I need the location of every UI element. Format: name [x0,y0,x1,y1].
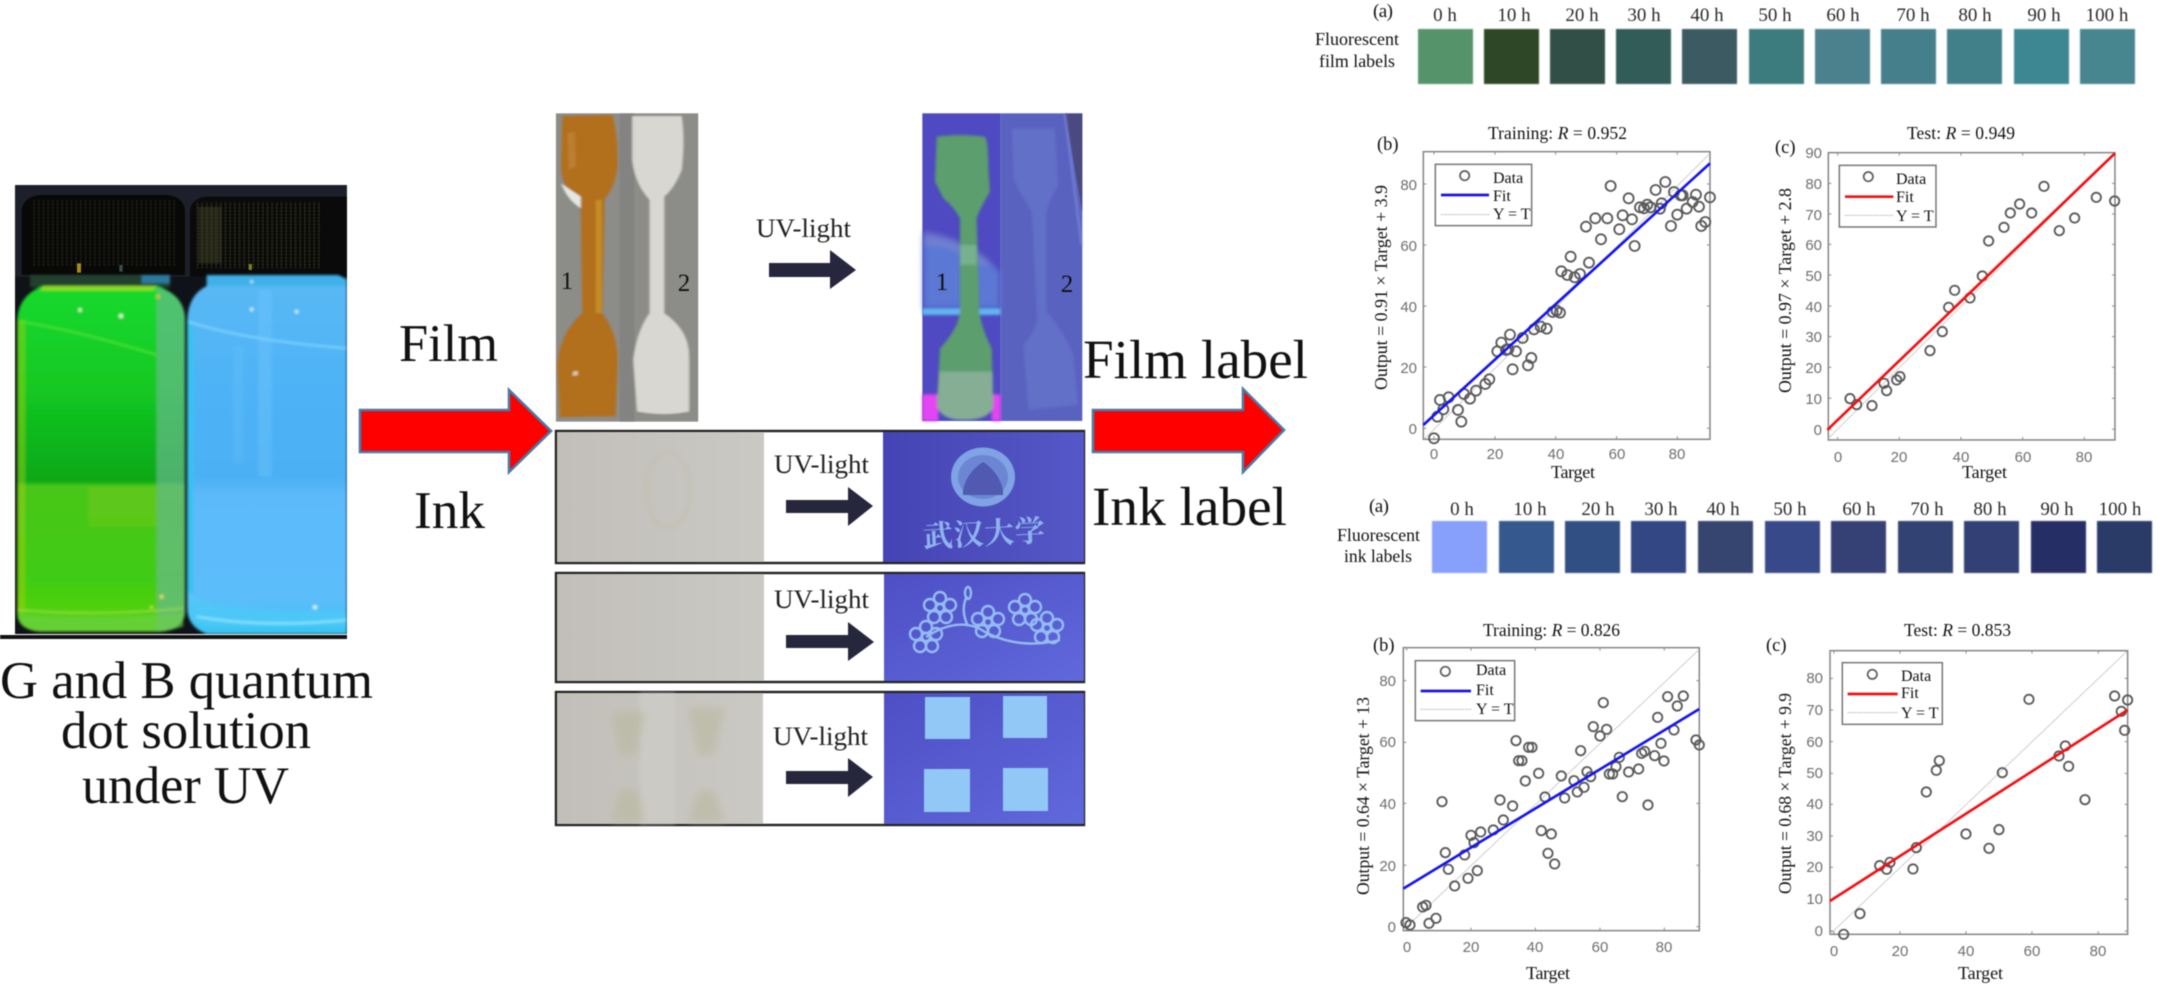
y axis label: Output = 0.91 × Target + 3.9 [1371,185,1391,390]
time labels: 50 h [1758,5,1792,26]
green vial [17,275,185,632]
time labels: 10 h [1497,5,1531,26]
paper before UV [557,432,764,562]
row title [1337,525,1420,566]
tick labels: 50 [1806,765,1823,782]
tick labels: 0 [1388,919,1396,936]
time labels: 90 h [2027,5,2061,26]
tick labels: 0 [1830,943,1838,960]
orange film specimen 1 [557,115,618,417]
tick labels: 80 [1805,176,1822,193]
y axis label: Output = 0.97 × Target + 2.8 [1775,188,1795,393]
tick labels: 70 [1805,207,1822,224]
arrow: red left arrow to film and ink [360,390,551,472]
vial base line [0,635,347,639]
tick labels: 20 [1892,943,1908,960]
arrow: red right arrow to labels [1093,389,1284,472]
tick labels: 10 [1806,891,1823,908]
photo: film samples in daylight: 2 [678,270,690,297]
tick labels: 40 [1958,943,1974,960]
tick labels: 80 [2090,943,2106,960]
paper before UV [557,574,764,681]
label: Film label: Film label [1083,329,1308,390]
time labels [1450,499,2142,520]
x axis label: Target [1551,462,1595,482]
photo: film samples in daylight: 1 [561,268,573,295]
time labels: 30 h [1644,499,1678,520]
tick labels [1806,670,2106,960]
time labels: 60 h [1826,5,1860,26]
legend text [1476,662,1514,718]
chart: film training scatter (b) [1371,123,1715,482]
legend text [1896,171,1934,225]
row title [1315,29,1399,71]
label: Ink label: Ink label [1092,476,1287,537]
time labels: 20 h [1565,5,1599,26]
UV-light label and arrow: UV-light [774,450,870,479]
chart: ink test scatter (c) [1766,620,2132,983]
photo: film samples under UV light: 1 [936,269,948,296]
tick labels: 40 [1400,299,1417,316]
legend box [1435,164,1532,226]
tick labels: 60 [2015,449,2031,466]
legend text: Fit [1896,189,1914,206]
chart: ink training scatter (b) [1353,620,1704,983]
tick labels: 60 [1400,238,1417,255]
tick labels: 20 [1487,446,1503,463]
legend text: Y = T [1493,206,1531,223]
legend text [1901,668,1939,722]
time labels: 10 h [1513,499,1547,520]
chart title: Test: R = 0.853 [1904,620,2011,640]
y axis label: Output = 0.64 × Target + 13 [1353,697,1373,895]
tick labels: 0 [1403,939,1411,956]
legend text: Data [1901,668,1931,685]
tick labels: 60 [1806,734,1823,751]
time labels: 50 h [1773,499,1807,520]
row title: Fluorescent [1315,29,1399,49]
colour swatches [1418,29,2135,84]
caption: G and B quantum dot solution under UV [0,652,373,815]
row title: Fluorescent [1337,525,1420,545]
UV-light label and arrow [773,722,873,797]
tick labels: 40 [1379,796,1396,813]
tick labels: 0 [1814,422,1822,439]
time labels: 20 h [1581,499,1615,520]
panel: fluorescent film label swatches [1315,1,2135,84]
tick labels: 80 [1669,446,1685,463]
UV-light label and arrow [774,450,873,526]
legend box [1415,661,1515,721]
UV-exposed flower side [884,574,1084,681]
tick labels: 20 [1805,360,1822,377]
tick labels: 10 [1805,391,1822,408]
legend text: Fit [1901,685,1919,702]
legend text: Y = T [1476,701,1514,718]
time labels: 70 h [1896,5,1930,26]
blue vial [187,275,347,634]
tick labels: 80 [1656,939,1672,956]
tick labels: 30 [1805,329,1822,346]
tick labels: 50 [1805,268,1822,285]
time labels: 60 h [1842,499,1876,520]
UV-light label and arrow [774,585,874,661]
tick labels: 20 [1891,449,1907,466]
plot area [1423,152,1715,443]
panel tag (a): (a) [1369,496,1389,517]
panel tag (b): (b) [1377,135,1399,155]
tick labels [1379,673,1672,956]
legend text: Y = T [1896,208,1934,225]
time labels: 30 h [1627,5,1661,26]
time labels: 40 h [1690,5,1724,26]
panel tag (b): (b) [1373,636,1395,656]
tick labels: 60 [1379,734,1396,751]
label and arrow: UV-light (film row) [756,214,856,289]
caption: G and B quantum dot solution under UV: dot solution [61,702,311,760]
tick labels: 40 [1527,939,1543,956]
paper before UV with faint squares [557,693,763,824]
legend text: Fit [1476,682,1494,699]
tick labels: 20 [1400,360,1417,377]
UV-light label and arrow: UV-light [774,585,870,614]
time labels: 100 h [2086,5,2129,26]
legend text: Data [1896,171,1926,188]
photo: film samples in daylight [556,113,698,422]
time labels: 0 h [1433,5,1457,26]
x axis label: Target [1962,462,2007,482]
tick labels [1400,177,1685,463]
tick labels: 40 [1953,449,1969,466]
UV-exposed logo side [883,432,1084,562]
tick labels: 80 [1379,673,1396,690]
tick labels: 60 [1592,939,1608,956]
label: Ink: Ink [414,482,485,540]
tick labels: 60 [2024,943,2040,960]
y axis label: Output = 0.68 × Target + 9.9 [1775,693,1795,894]
legend text: Data [1476,662,1506,679]
panel: fluorescent ink label swatches [1337,496,2152,573]
tick labels: 70 [1806,702,1823,719]
UV-exposed logo side: 武汉大学 [922,515,1046,554]
tick labels: 40 [1805,299,1822,316]
tick labels: 0 [1409,421,1417,438]
time labels: 0 h [1450,499,1474,520]
chart title: Training: R = 0.826 [1483,620,1620,640]
tick labels: 0 [1430,446,1438,463]
legend text: Data [1493,170,1523,187]
tick labels: 40 [1806,796,1823,813]
tick labels: 20 [1806,859,1823,876]
tick labels: 80 [1400,177,1417,194]
chart title: Training: R = 0.952 [1488,123,1627,143]
time labels: 70 h [1910,499,1944,520]
tick labels: 0 [1815,923,1823,940]
UV-light label and arrow: UV-light [773,722,869,751]
tick labels: 80 [2076,449,2092,466]
panel tag (a): (a) [1373,1,1393,22]
photo: film samples under UV light [922,113,1082,421]
time labels [1433,5,2129,26]
panel tag (c): (c) [1766,636,1787,656]
legend text [1493,170,1531,223]
tick labels: 60 [1609,446,1625,463]
legend text: Fit [1493,188,1511,205]
time labels: 80 h [1958,5,1992,26]
time labels: 80 h [1973,499,2007,520]
tick labels: 20 [1379,858,1396,875]
colour swatches [1432,521,2152,573]
tick labels: 90 [1805,145,1822,162]
label and arrow: UV-light (film row): UV-light [756,214,852,243]
legend box [1839,165,1936,227]
tick labels: 0 [1834,449,1842,466]
legend text: Y = T [1901,705,1939,722]
legend box [1842,663,1942,724]
plot area [1401,648,1704,931]
photo: green and blue quantum dot vials under UV [15,185,347,634]
panel: ink print 3, squares [556,692,1084,825]
white film specimen 2 [632,116,689,414]
caption: G and B quantum dot solution under UV: G and B quantum [0,652,373,710]
row title: film labels [1319,51,1395,71]
panel: ink print 1, university logo [556,431,1084,563]
plot area [1830,651,2132,939]
vial caps [22,195,347,277]
tick labels: 40 [1548,446,1564,463]
tick labels: 80 [1806,670,1823,687]
caption: G and B quantum dot solution under UV: under UV [82,757,289,815]
tick labels: 60 [1805,237,1822,254]
plot area [1827,153,2119,440]
time labels: 40 h [1706,499,1740,520]
panel tag (c): (c) [1775,138,1796,158]
row title: ink labels [1344,546,1412,566]
label: Film: Film [399,315,498,373]
chart: film test scatter (c) [1775,123,2119,482]
time labels: 90 h [2040,499,2074,520]
tick labels: 20 [1463,939,1479,956]
UV-exposed squares side [884,693,1084,824]
tick labels [1805,145,2092,466]
x axis label: Target [1526,963,1570,983]
photo: film samples under UV light: 2 [1061,271,1073,298]
panel: ink print 2, flowers [556,573,1084,682]
x axis label: Target [1958,963,2003,983]
chart title: Test: R = 0.949 [1907,123,2015,143]
tick labels: 30 [1806,828,1823,845]
time labels: 100 h [2099,499,2142,520]
